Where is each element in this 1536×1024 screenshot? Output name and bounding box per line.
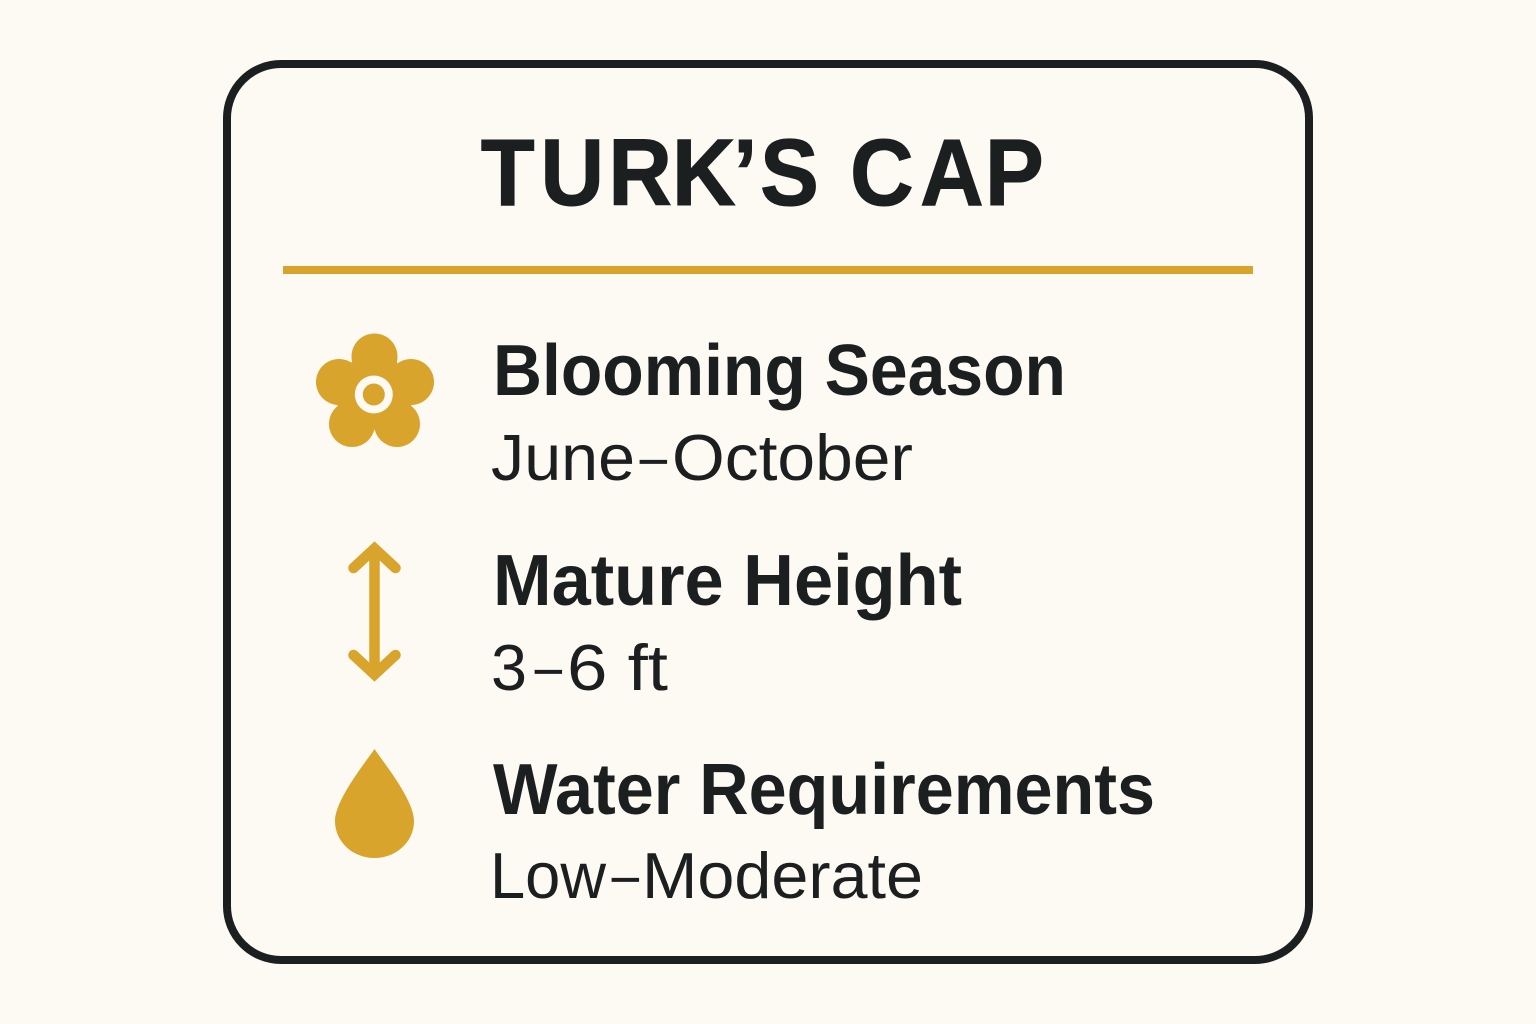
text block: blooming season: Blooming Season [493,331,1066,411]
text block: blooming season [491,331,1066,494]
icon: flower [316,334,434,447]
text block: mature height [491,541,962,704]
panel: plant card [227,64,1309,960]
text block: water requirements: Water Requirements [493,750,1155,830]
text block: blooming season: October [672,421,913,494]
text block: water requirements [490,750,1155,912]
title: TURK’S CAP [481,120,1044,226]
text block: water requirements: Low [490,839,607,912]
text block: mature height: Mature Height [493,541,962,621]
icon: water drop [335,749,414,858]
text block: mature height: 3 [491,631,527,704]
text block: mature height: – [535,642,562,695]
icon: height arrow [354,548,396,674]
title divider [283,266,1253,274]
text block: blooming season: June [491,421,635,494]
text block: water requirements: – [612,850,639,903]
text block: blooming season: – [640,432,667,485]
text block: mature height: 6 ft [567,631,668,704]
text block: water requirements: Moderate [642,839,923,912]
